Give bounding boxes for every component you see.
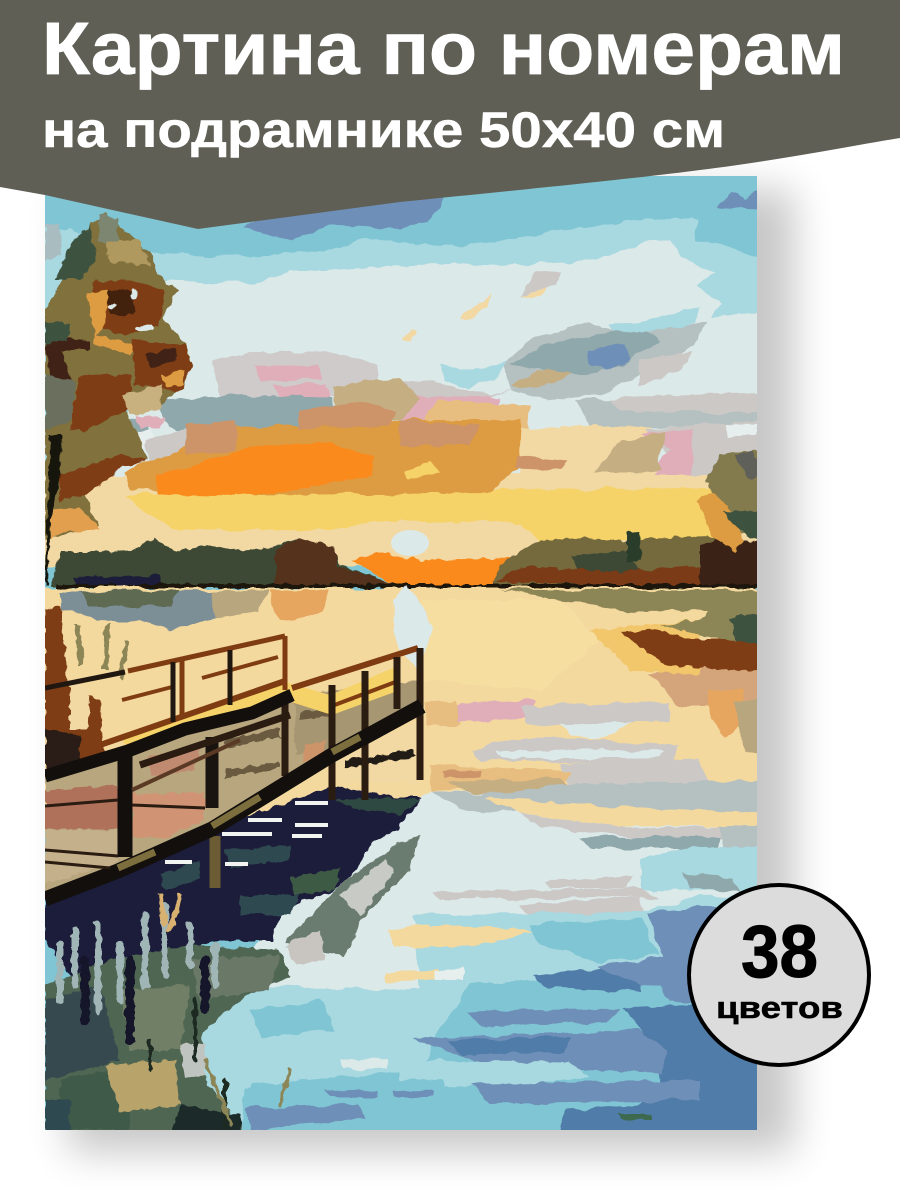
right tree xyxy=(696,450,757,553)
yellow light behind far railing xyxy=(120,665,400,745)
water under pier xyxy=(45,786,422,987)
near railing xyxy=(45,648,422,899)
title: Картина по номерам xyxy=(42,7,845,90)
canvas shadow xyxy=(68,190,794,1152)
left tree xyxy=(45,214,192,585)
sky xyxy=(40,192,770,490)
reed stalks xyxy=(60,895,290,1130)
pier xyxy=(45,636,422,899)
horizon trees xyxy=(50,532,770,590)
water glints xyxy=(165,803,328,864)
left reeds behind pier xyxy=(45,605,130,780)
badge: 38 colours: 38 xyxy=(741,910,818,993)
brown island xyxy=(589,608,757,676)
pier deck xyxy=(45,680,422,899)
foreground reeds xyxy=(45,835,420,1135)
banner xyxy=(0,0,900,229)
subtitle: на подрамнике 50х40 см xyxy=(42,102,725,158)
far railing xyxy=(45,636,285,745)
lower water xyxy=(190,780,770,1140)
sun xyxy=(391,530,429,556)
badge: 38 colours xyxy=(689,885,869,1065)
painting: lake at sunset xyxy=(40,176,770,1140)
badge: 38 colours: цветов xyxy=(716,990,843,1025)
lake reflections xyxy=(40,585,770,828)
sunset clouds xyxy=(40,403,770,566)
